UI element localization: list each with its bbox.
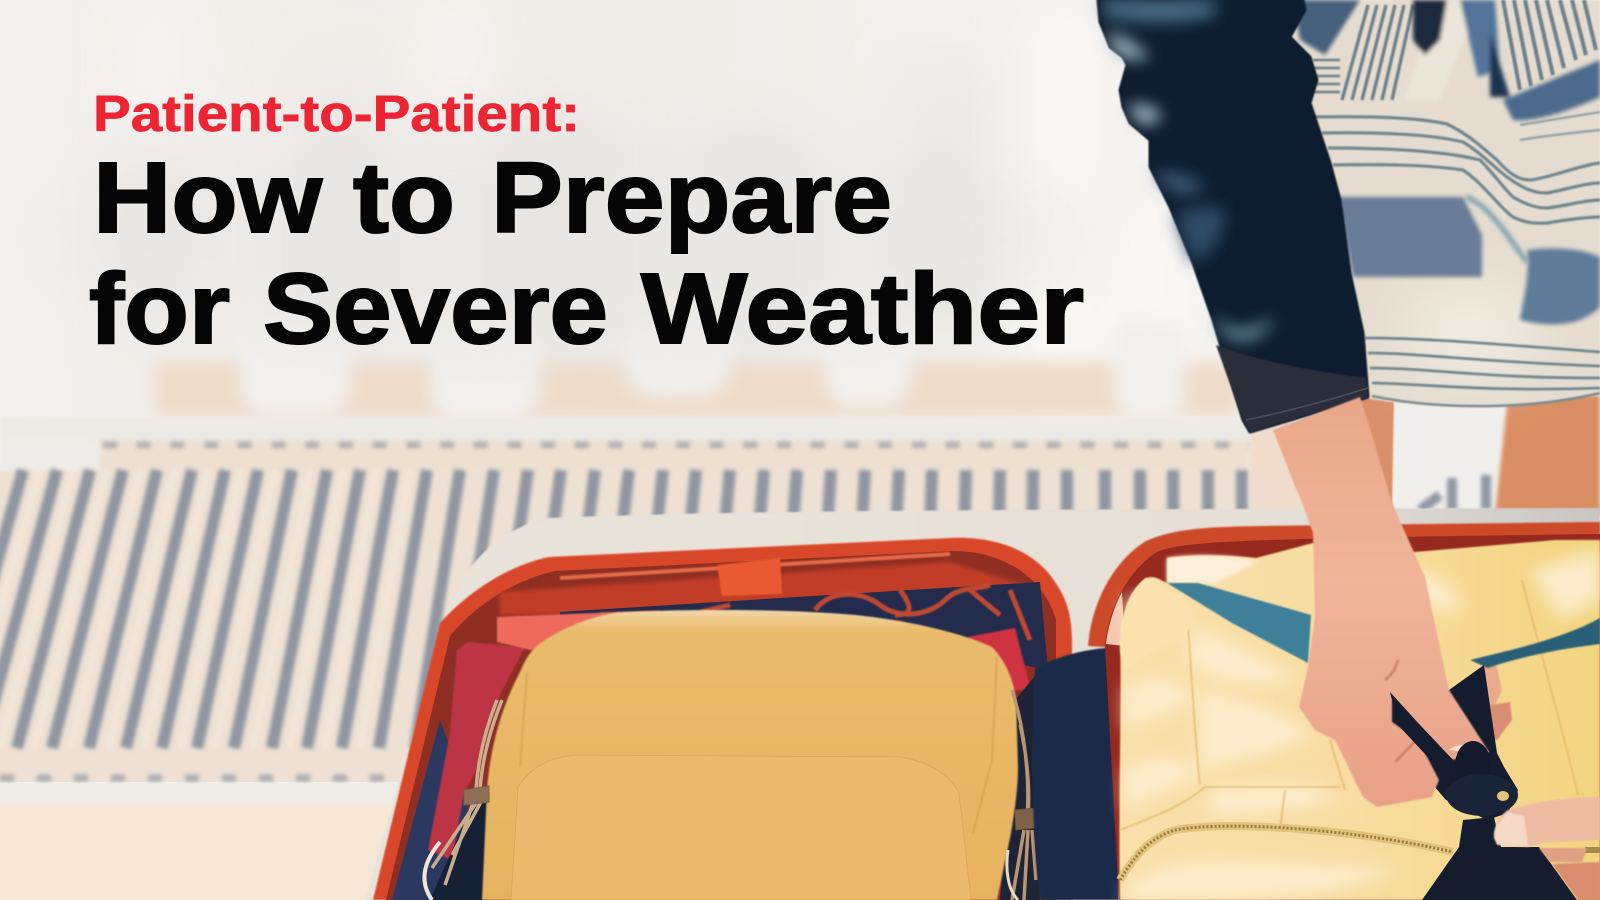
window sill xyxy=(0,418,1300,442)
curtain lobes xyxy=(240,320,1185,420)
navy pattern under cloth xyxy=(392,720,470,900)
navy folded clothes xyxy=(1033,647,1119,900)
jacket sleeve xyxy=(1098,0,1368,432)
blue strap end xyxy=(1470,618,1600,668)
mustard backpack xyxy=(424,610,1036,900)
finger creases xyxy=(1385,660,1418,762)
soft haze behind title xyxy=(50,120,1090,360)
quilted yellow jacket xyxy=(1119,540,1600,900)
wall and curtain background xyxy=(0,0,1600,450)
thumb nail xyxy=(1448,744,1489,752)
dress dark panels xyxy=(1293,0,1600,324)
helper hand at bottom right xyxy=(1494,797,1600,900)
orange tab xyxy=(717,558,782,596)
eyebrow: Patient-to-Patient: xyxy=(93,85,580,142)
jacket shoulder lobe over strap xyxy=(1120,578,1196,670)
coral cloth xyxy=(497,612,620,650)
jacket zipper xyxy=(1120,826,1600,880)
backpack right cords xyxy=(1007,690,1036,900)
black strap xyxy=(1388,665,1577,900)
title line two xyxy=(89,253,1084,365)
title line two: Weather xyxy=(641,253,1084,365)
left compartment frame xyxy=(373,538,1072,900)
title line one: to xyxy=(353,142,455,254)
striped dress xyxy=(1285,0,1600,407)
title line one xyxy=(93,142,892,254)
crimson cloth right xyxy=(968,628,1031,690)
crimson cloth left xyxy=(428,642,525,860)
title line two: Severe xyxy=(263,253,608,365)
hands holding the strap xyxy=(1273,397,1600,900)
dress wavy stripes xyxy=(1313,112,1600,389)
suitcase shell xyxy=(365,508,1600,900)
knot and ring xyxy=(1446,741,1518,816)
backpack pocket xyxy=(511,755,971,900)
sleeve highlights xyxy=(1102,0,1275,341)
title line two: for xyxy=(89,253,230,365)
strap in palm gap xyxy=(1390,692,1455,770)
dark gap xyxy=(430,800,490,900)
far fingers xyxy=(1482,664,1512,740)
hand and forearm xyxy=(1273,397,1489,807)
background legs and gap xyxy=(1250,395,1600,515)
radiator xyxy=(0,440,1300,782)
left compartment interior xyxy=(386,551,1056,900)
backpack left cords xyxy=(424,700,502,900)
title line one: How xyxy=(93,142,322,254)
teal strap xyxy=(1167,583,1311,663)
right compartment frame xyxy=(1088,522,1600,900)
title line one: Prepare xyxy=(491,142,892,254)
suitcase xyxy=(365,508,1600,900)
floor xyxy=(0,784,420,900)
peach window band behind curtain folds xyxy=(155,362,1240,417)
dress vertical stripes xyxy=(1313,0,1596,100)
title block xyxy=(89,85,1084,365)
patterned fabric xyxy=(560,582,1048,670)
